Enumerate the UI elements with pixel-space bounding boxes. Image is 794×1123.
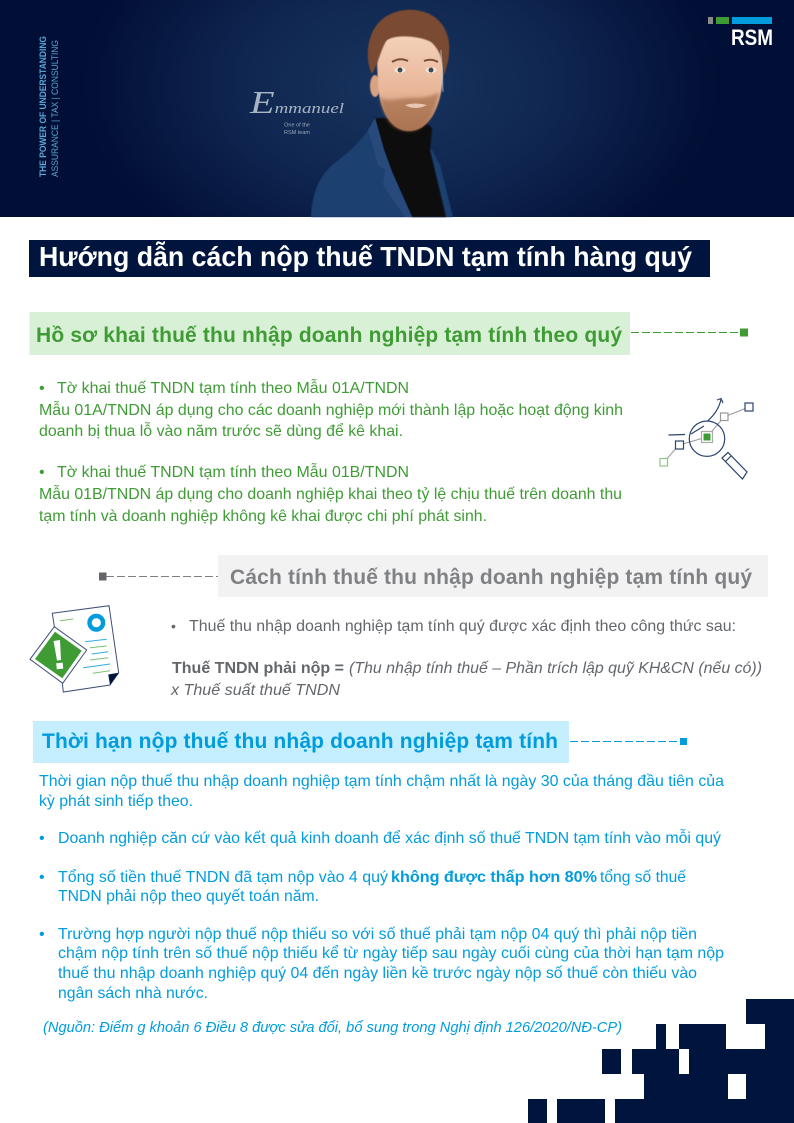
text block: payment deadline: không được thấp hơn 80% <box>391 869 597 886</box>
text block: payment deadline: kỳ phát sinh tiếp theo. <box>39 793 193 810</box>
section heading: Hồ sơ khai thuế <box>30 312 748 355</box>
text block: payment deadline <box>39 773 724 1002</box>
text block: calculation formula: (Thu nhập tính thuế – Phần trích lập quỹ KH&CN (nếu có)) <box>349 660 762 677</box>
caption: one of the RSM team: One of the <box>284 122 310 128</box>
text block: payment deadline: ngân sách nhà nước. <box>58 985 208 1002</box>
text block: payment deadline: • <box>39 926 45 943</box>
caption: one of the RSM team: RSM team <box>284 130 310 136</box>
text block: payment deadline: chậm nộp tính trên số thuế nộp thiếu kể từ ngày tiếp sau ngày cuối cùng của thời hạn tạm nộp <box>58 944 724 962</box>
title: Hướng dẫn cách nộp thuế TNDN tạm tính hàng quý <box>39 241 692 272</box>
source note: (Nguồn: Điểm g khoản 6 Điều 8 được sửa đổi, bổ sung trong Nghị định 126/2020/NĐ-CP) <box>43 1020 622 1036</box>
section heading: Thời hạn nộp thuế: Thời hạn nộp thuế thu nhập doanh nghiệp tạm tính <box>42 730 558 753</box>
icon: magnifier with data nodes <box>660 398 753 479</box>
signature: Emmanuel <box>249 84 344 136</box>
text block: payment deadline: thuế thu nhập doanh nghiệp quý 04 đến ngày liền kề trước ngày nộp số thuế còn thiếu vào <box>58 965 697 982</box>
text block: calculation formula: x Thuế suất thuế TNDN <box>170 682 340 699</box>
vertical tagline: ASSURANCE | TAX | CONSULTING <box>50 40 61 177</box>
header banner <box>0 0 794 217</box>
text block: payment deadline: Doanh nghiệp căn cứ vào kết quả kinh doanh để xác định số thuế TNDN tạm tính vào mỗi quý <box>58 828 721 847</box>
icon: tax document with warning diamond <box>30 606 119 692</box>
text block: filing documents: tạm tính và doanh nghiệp không kê khai được chi phí phát sinh. <box>39 508 487 525</box>
section heading: Thời hạn nộp thuế <box>33 721 687 763</box>
text block: filing documents: doanh bị thua lỗ vào năm trước sẽ dùng để kê khai. <box>39 421 403 440</box>
text block: filing documents: Tờ khai thuế TNDN tạm tính theo Mẫu 01B/TNDN <box>57 462 409 481</box>
portrait photo <box>311 10 453 217</box>
vertical tagline <box>38 36 61 177</box>
decorative pixel blocks <box>528 999 794 1123</box>
text block: filing documents: Mẫu 01A/TNDN áp dụng cho các doanh nghiệp mới thành lập hoặc hoạt động kinh <box>39 400 623 419</box>
text block: payment deadline: • <box>39 869 45 886</box>
section heading: Hồ sơ khai thuế: Hồ sơ khai thuế thu nhập doanh nghiệp tạm tính theo quý <box>36 324 622 347</box>
text block: payment deadline: Thời gian nộp thuế thu nhập doanh nghiệp tạm tính chậm nhất là ngày 30 của tháng đầu tiên của <box>39 773 724 790</box>
signature: Emmanuel: E mmanuel <box>249 84 344 120</box>
text block: payment deadline: Tổng số tiền thuế TNDN đã tạm nộp vào 4 quý <box>58 868 388 886</box>
text block: filing documents: • <box>39 464 45 481</box>
text block: payment deadline: Trường hợp người nộp thuế nộp thiếu so với số thuế phải tạm nộp 04 quý thì phải nộp tiền <box>58 926 697 943</box>
text block: calculation formula: Thuế thu nhập doanh nghiệp tạm tính quý được xác định theo công thức sau: <box>189 618 736 635</box>
text block: filing documents <box>39 378 623 525</box>
text block: payment deadline: TNDN phải nộp theo quyết toán năm. <box>58 888 319 905</box>
RSM logo: RSM <box>731 25 773 50</box>
RSM logo <box>708 17 773 50</box>
section heading: Cách tính thuế: Cách tính thuế thu nhập doanh nghiệp tạm tính quý <box>230 566 752 589</box>
text block: payment deadline: • <box>39 830 45 847</box>
text block: filing documents: • <box>39 380 45 397</box>
text block: filing documents: Tờ khai thuế TNDN tạm tính theo Mẫu 01A/TNDN <box>57 378 409 397</box>
vertical tagline: THE POWER OF UNDERSTANDING <box>38 36 49 177</box>
text block: filing documents: Mẫu 01B/TNDN áp dụng cho doanh nghiệp khai theo tỷ lệ chịu thuế trên doanh thu <box>39 484 622 503</box>
text block: calculation formula <box>170 618 762 699</box>
section heading: Cách tính thuế <box>99 555 768 597</box>
text block: calculation formula: • <box>171 618 176 634</box>
text block: calculation formula: Thuế TNDN phải nộp = <box>172 660 344 677</box>
text block: payment deadline: tổng số thuế <box>600 868 686 886</box>
